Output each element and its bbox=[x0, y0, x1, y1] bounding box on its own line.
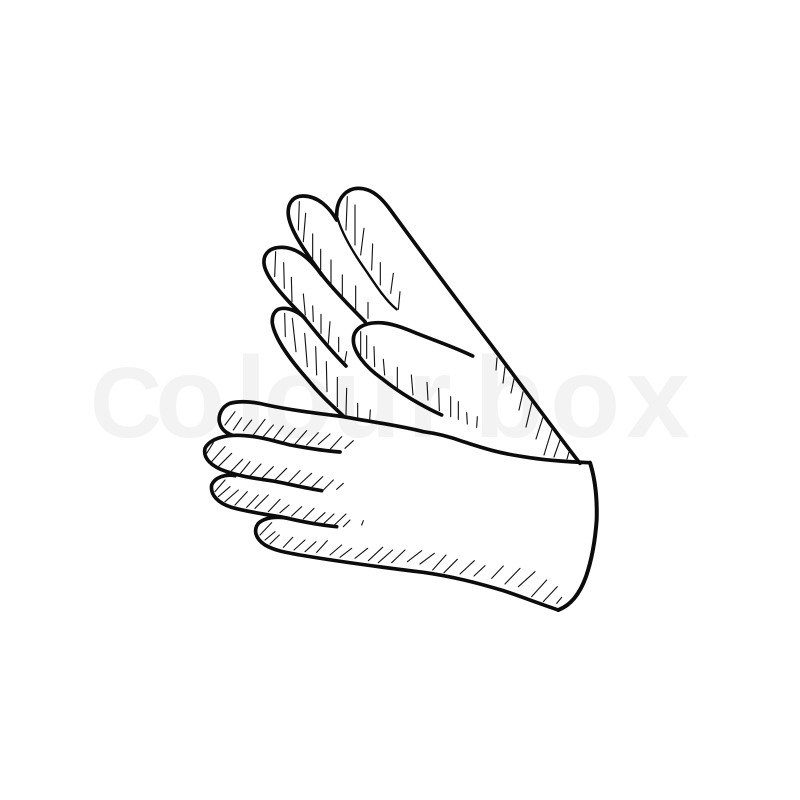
front glove hatching bbox=[207, 412, 562, 603]
back glove hatching bbox=[275, 197, 477, 427]
icon: back glove bbox=[264, 188, 580, 463]
front glove outline bbox=[205, 402, 597, 610]
back glove edge hatching bbox=[496, 358, 569, 459]
icon: front glove bbox=[205, 402, 597, 610]
watermark: Colourbox: C bbox=[90, 347, 162, 459]
watermark: Colourbox: olourbox bbox=[155, 334, 690, 462]
back glove outline bbox=[264, 188, 580, 463]
